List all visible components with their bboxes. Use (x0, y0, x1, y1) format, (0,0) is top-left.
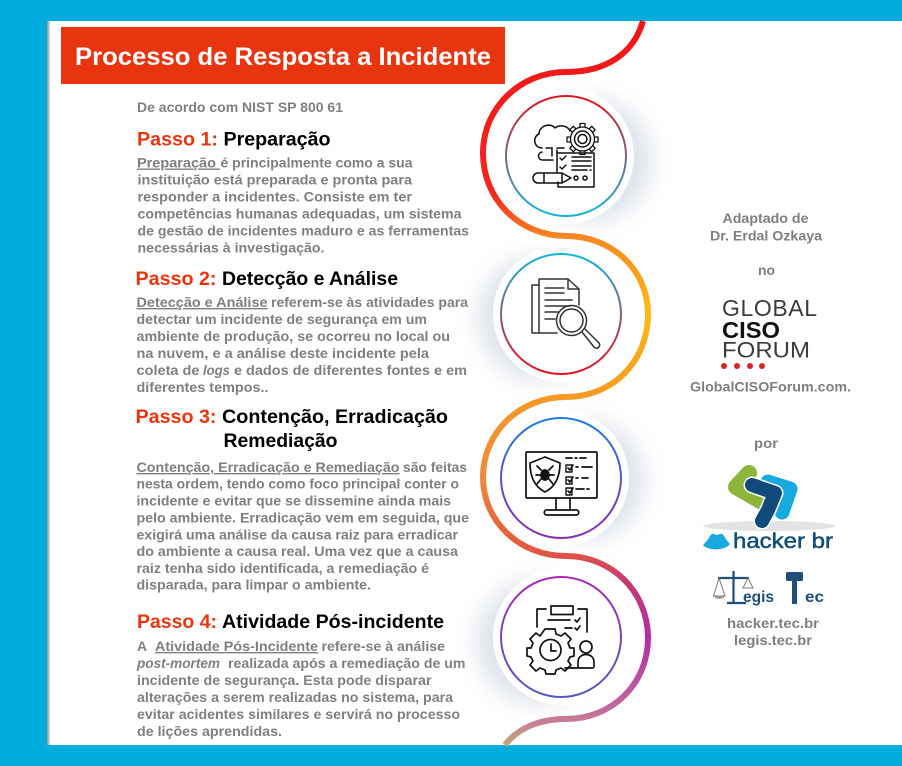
step 4 heading: Atividade Pós-incidente (222, 611, 444, 633)
step 3 heading (136, 406, 448, 452)
step 1 text: instituição está preparada e pronta para (138, 172, 412, 188)
forum website: GlobalCISOForum.com. (690, 380, 851, 394)
step 4 text: evitar acidentes similares e servirá no processo (137, 707, 460, 722)
step 3 heading: Contenção, Erradicação (222, 406, 448, 428)
step 3 text (136, 460, 469, 592)
step 3 heading: Remediação (224, 430, 338, 452)
logo: Global CISO Forum: CISO (722, 317, 780, 343)
websites (727, 616, 820, 648)
title banner (61, 27, 505, 84)
step 4 text: de lições aprendidas. (137, 724, 282, 739)
step 1 text: é principalmente como a sua (220, 156, 413, 170)
step 1 text (137, 156, 469, 256)
step 2 text: detectar um incidente de segurança em um (136, 312, 427, 327)
step 3 text: do ambiente a causa real. Uma vez que a causa (136, 544, 458, 559)
attribution text: Dr. Erdal Ozkaya (710, 228, 823, 244)
icon: document and magnifier (532, 279, 600, 348)
step 1 text: Preparação (137, 156, 220, 170)
step 2 text (136, 295, 468, 395)
step 4 text: realizada após a remediação de um (228, 656, 466, 671)
step 2 text: referem-se às atividades para (271, 295, 468, 310)
step 4 text: refere-se à análise (322, 639, 445, 654)
step 2 text: coleta de (136, 363, 200, 378)
logo: hackerbr: hacker br (733, 530, 833, 553)
connector word: por (754, 436, 779, 451)
icon: cloud, gear, checklist and pencil (533, 124, 598, 187)
step 2 text: diferentes tempos.. (136, 380, 268, 395)
websites: legis.tec.br (734, 633, 813, 648)
left blue band (0, 0, 47, 766)
logo: LegisTec (714, 571, 824, 606)
step 4 text: A (137, 639, 147, 654)
step 3 text: nesta ordem, tendo como foco principal conter o (136, 476, 459, 492)
step 4 text: incidente de segurança. Esta pode disparar (137, 673, 432, 688)
step 3 text: raiz tenha sido identificada, a remediação é (136, 561, 429, 576)
step 1 text: necessárias à investigação. (138, 240, 324, 256)
step 2 heading: Passo 2: (136, 268, 216, 290)
step 2 circle with document search icon (493, 246, 629, 382)
step 2 text: Detecção e Análise (136, 295, 268, 310)
step 3 text: incidente e evitar que se dissemine ainda mais (136, 494, 451, 508)
step 1 heading: Preparação (224, 128, 331, 150)
attribution text (710, 211, 823, 244)
title banner: Processo de Resposta a Incidente (75, 43, 491, 71)
step 4 text: post-mortem (136, 656, 220, 671)
logo: LegisTec: egis (743, 589, 774, 606)
attribution text: Adaptado de (722, 211, 809, 226)
step 2 text: ambiente de produção, se ocorreu no local ou (136, 329, 450, 344)
step 4 text: Atividade Pós-Incidente (155, 639, 318, 654)
logo: Global CISO Forum (721, 295, 817, 369)
logo: Global CISO Forum: FORUM (722, 338, 810, 362)
step 1 heading: Passo 1: (137, 128, 218, 150)
step 1 heading (137, 128, 331, 150)
icon: clipboard, clock gear and person (527, 606, 594, 674)
step 1 circle with planning icon (498, 88, 634, 224)
step 3 text: Contenção, Erradicação e Remediação (136, 460, 400, 475)
logo: LegisTec: ec (805, 589, 824, 606)
logo: hackerbr (703, 473, 835, 553)
step 1 text: de gestão de incidentes maduro e as ferramentas (138, 224, 469, 238)
step 2 text: e dados de diferentes fontes e em (234, 363, 467, 378)
step 3 text: pelo ambiente. Erradicação vem em seguida, que (136, 510, 469, 526)
step 1 text: competências humanas adequadas, um sistema (138, 206, 462, 222)
step 4 circle with post-incident icon (493, 569, 629, 705)
connector word: no (758, 263, 775, 278)
winding gradient ribbon (483, 21, 648, 745)
step 2 heading (136, 268, 398, 290)
step 3 circle with security monitor icon (493, 410, 629, 546)
step 3 heading: Passo 3: (136, 406, 216, 428)
websites: hacker.tec.br (727, 616, 820, 631)
step 4 heading: Passo 4: (137, 611, 217, 633)
icon: monitor with shield and bug (526, 452, 597, 515)
step 2 heading: Detecção e Análise (222, 268, 398, 290)
circle shadows (476, 98, 652, 704)
step 4 text: alterações a serem realizadas no sistema, para (137, 690, 453, 705)
step 3 text: disparada, para limpar o ambiente. (136, 578, 371, 592)
step 2 text: logs (203, 363, 230, 378)
logo: Global CISO Forum: GLOBAL (722, 295, 817, 321)
top blue band (47, 0, 902, 21)
bottom blue band (47, 745, 902, 766)
step 3 text: exigirá uma análise da causa raiz para erradicar (136, 528, 459, 542)
step 3 text: são feitas (403, 460, 467, 475)
step 2 text: na nuvem, e a análise deste incidente pela (136, 346, 429, 361)
step 1 text: responder a incidentes. Consiste em ter (138, 190, 413, 204)
subtitle: De acordo com NIST SP 800 61 (137, 100, 344, 115)
step 4 text (136, 639, 466, 739)
